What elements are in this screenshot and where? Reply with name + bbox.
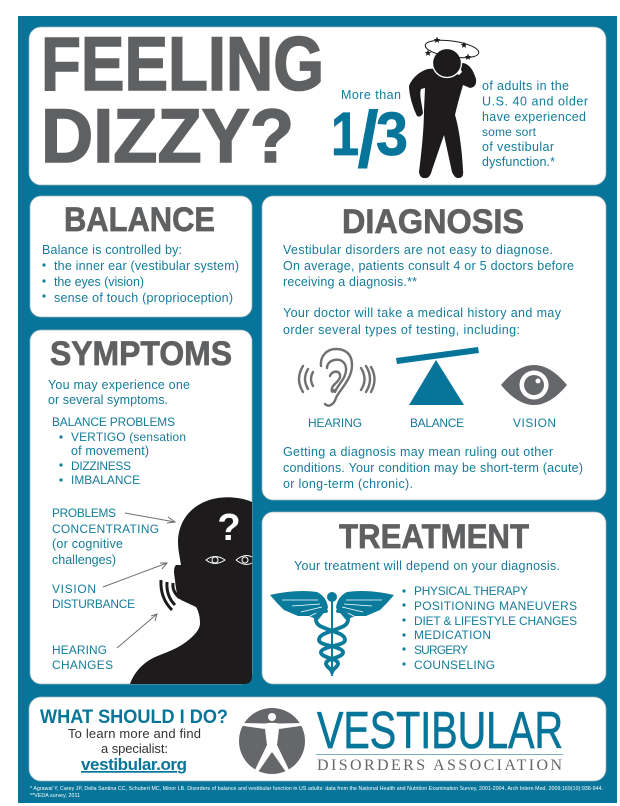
diagnosis closing text: Getting a diagnosis may mean ruling out other (283, 445, 553, 459)
call to action text (68, 726, 201, 756)
icon: caduceus (270, 591, 394, 676)
heading: symptoms: SYMPTOMS (50, 335, 232, 373)
footnotes (30, 786, 603, 799)
more than label: More than (341, 88, 401, 102)
treatment list (402, 584, 577, 672)
diagnosis intro text: Vestibular disorders are not easy to diagnose. (283, 243, 553, 257)
label: vision disturbance (52, 582, 135, 611)
diagnosis intro text: Your doctor will take a medical history and may (283, 306, 562, 320)
arrow: to forehead (125, 513, 175, 523)
icon labels: VISION (513, 416, 556, 430)
panel: diagnosis (262, 196, 606, 500)
statistic: one third: / (357, 95, 379, 184)
footnotes: * Agrawal Y, Carey JP, Della Santina CC, Schubert MC, Minor LB. Disorders of balance and vestibular function in US adults: data from the National Health and Nutrition Examination Survey, 2001-2004. Arch Intern Med. 2009;169(10):938-944. (30, 786, 603, 792)
label: problems concentrating: challenges) (52, 553, 116, 567)
statistic description: of vestibular (482, 140, 554, 154)
label: hearing changes: HEARING (52, 643, 107, 657)
label: problems concentrating: CONCENTRATING (52, 522, 159, 536)
symptoms intro: or several symptoms. (48, 393, 168, 407)
title (41, 22, 324, 179)
treatment list: SURGERY (414, 643, 468, 657)
icon: eye (501, 365, 567, 405)
label: vision disturbance: DISTURBANCE (52, 597, 135, 611)
balance text: Balance is controlled by: (42, 243, 182, 257)
treatment list: PHYSICAL THERAPY (414, 584, 528, 598)
icon: sound waves (161, 580, 180, 610)
panel: feeling dizzy header (29, 22, 606, 185)
statistic description: of adults in the (482, 79, 569, 93)
panel: what should i do (29, 697, 606, 781)
statistic description: have experienced (482, 110, 586, 124)
diagnosis intro text: On average, patients consult 4 or 5 doctors before (283, 259, 574, 273)
diagnosis closing text (283, 445, 583, 491)
symptoms intro (48, 378, 190, 407)
statistic: one third (331, 95, 408, 184)
head silhouette (130, 497, 252, 684)
panel: treatment (262, 512, 606, 684)
icon labels: BALANCE (410, 416, 464, 430)
icon: dizzy person (409, 37, 480, 178)
balance text: sense of touch (proprioception) (54, 291, 233, 305)
statistic: one third: 1 (331, 100, 359, 168)
balance text: the eyes (vision) (54, 275, 144, 289)
diagnosis intro text: receiving a diagnosis.** (283, 275, 417, 289)
statistic description: some sort (482, 125, 537, 139)
icon labels (308, 416, 556, 430)
arrow: to eyes (103, 563, 167, 587)
logo: divider rule (316, 753, 563, 756)
treatment list: POSITIONING MANEUVERS (414, 599, 577, 613)
label: hearing changes (52, 643, 113, 672)
call to action text: a specialist: (101, 741, 168, 756)
treatment list: MEDICATION (414, 628, 491, 642)
diagnosis closing text: or long-term (chronic). (283, 477, 413, 491)
heading: balance: BALANCE (64, 201, 215, 239)
panel: symptoms (30, 330, 252, 684)
diagnosis closing text: conditions. Your condition may be short-term (acute) (283, 461, 583, 475)
statistic description (482, 79, 588, 169)
heading: treatment: TREATMENT (339, 518, 529, 556)
diagnosis intro text (283, 243, 574, 337)
statistic description: U.S. 40 and older (482, 94, 588, 108)
heading: what should i do: WHAT SHOULD I DO? (40, 706, 228, 728)
footnotes: **VEDA survey, 2011 (30, 793, 80, 799)
balance problems list: DIZZINESS (71, 459, 131, 473)
heading: diagnosis: DIAGNOSIS (342, 203, 524, 241)
label: problems concentrating: (or cognitive (52, 537, 123, 551)
balance problems list: BALANCE PROBLEMS (52, 415, 175, 429)
balance problems list (52, 415, 186, 487)
icon labels: HEARING (308, 416, 362, 430)
head silhouette: ? (217, 507, 241, 549)
treatment list: COUNSELING (414, 658, 495, 672)
logo: vitruvian figure (239, 708, 305, 774)
icon: ear with sound waves (299, 349, 374, 406)
statistic: one third: 3 (376, 100, 408, 168)
balance problems list: VERTIGO (sensation (71, 430, 186, 444)
label: problems concentrating: PROBLEMS (52, 506, 116, 520)
statistic description: dysfunction.* (482, 155, 555, 169)
label: vision disturbance: VISION (52, 582, 96, 596)
balance problems list: IMBALANCE (71, 473, 140, 487)
diagnosis intro text: order several types of testing, including: (283, 323, 520, 337)
balance problems list: of movement) (71, 444, 149, 458)
icon: balance scale (396, 347, 479, 405)
title: FEELING (41, 22, 324, 107)
balance text: the inner ear (vestibular system) (54, 259, 239, 273)
symptoms intro: You may experience one (48, 378, 190, 392)
call to action text: To learn more and find (68, 726, 201, 741)
label: problems concentrating (52, 506, 159, 567)
label: hearing changes: CHANGES (52, 658, 113, 672)
panel: balance (30, 196, 252, 317)
title: DIZZY? (41, 94, 294, 179)
logo: disorders association: DISORDERS ASSOCIATION (317, 757, 562, 774)
treatment list: DIET & LIFESTYLE CHANGES (414, 614, 577, 628)
balance text (42, 243, 239, 305)
website link: vestibular.org (81, 755, 187, 774)
treatment intro: Your treatment will depend on your diagnosis. (294, 559, 560, 573)
arrow: to ear (117, 614, 157, 648)
